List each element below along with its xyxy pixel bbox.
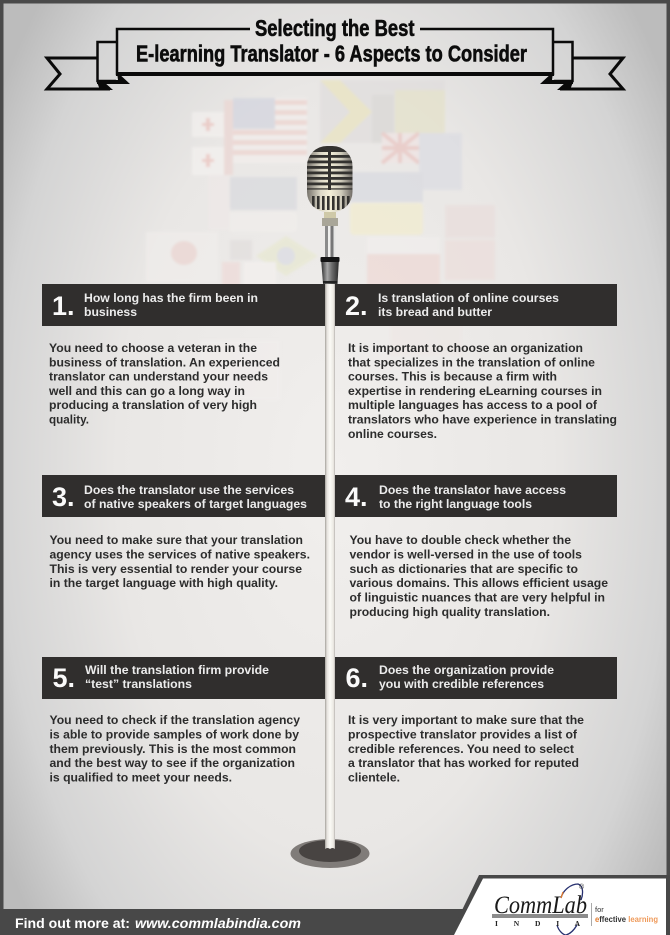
logo panel: [450, 875, 670, 935]
heading bar 6: [335, 657, 617, 699]
body text 3: This is very essential to render your course: [50, 562, 302, 576]
flag: South Africa: [320, 80, 445, 143]
body text 5: [50, 713, 300, 785]
microphone stand pole: [325, 280, 335, 847]
panel 3: [42, 475, 325, 590]
heading bar 4: 4.: [345, 482, 368, 512]
body text 4: [350, 533, 608, 619]
panel 1: [42, 284, 325, 426]
heading bar 5: “test” translations: [85, 677, 192, 691]
logo: CommLab India: I N D I A: [495, 919, 581, 928]
title text: [136, 15, 527, 66]
heading bar 4: [335, 475, 617, 517]
flag: blue and white panel: [229, 177, 297, 232]
body text 1: business of translation. An experienced: [49, 355, 280, 369]
heading bar 4: to the right language tools: [379, 497, 532, 511]
body text 6: prospective translator provides a list of: [348, 727, 578, 741]
panel 2: [335, 284, 617, 441]
heading bar 2: Is translation of online courses: [378, 291, 559, 305]
body text 1: well and this can go a long way in: [48, 384, 245, 398]
body text 2: [348, 341, 617, 441]
heading bar 2: its bread and butter: [378, 305, 492, 319]
heading bar 2: 2.: [345, 291, 368, 321]
flag: red and white stripes: [208, 175, 495, 290]
body text 1: translator can understand your needs: [49, 370, 268, 384]
body text 4: such as dictionaries that are specific to: [350, 562, 578, 576]
body text 2: that specializes in the translation of online: [348, 355, 595, 369]
logo: CommLab India: ®: [579, 883, 585, 891]
body text 5: them previously. This is the most common: [50, 742, 296, 756]
flag: Ukraine: [350, 172, 423, 235]
logo: CommLab India: [492, 883, 658, 935]
body text 4: various domains. This allows efficient usage: [350, 576, 608, 590]
heading bar 3: [42, 475, 325, 517]
title ribbon: [47, 15, 623, 90]
heading bar 3: of native speakers of target languages: [84, 497, 307, 511]
flag: Georgia pair: [192, 100, 233, 175]
microphone: [305, 146, 355, 284]
body text 6: credible references. You need to select: [348, 742, 574, 756]
heading bar 1: 1.: [52, 291, 75, 321]
body text 1: quality.: [49, 412, 89, 426]
body text 2: It is important to choose an organization: [348, 341, 583, 355]
body text 5: is qualified to meet your needs.: [50, 771, 232, 785]
ribbon folds: [97, 42, 573, 84]
body text 4: You have to double check whether the: [350, 533, 571, 547]
flag: Australia: [419, 133, 462, 190]
heading bar 1: How long has the firm been in: [84, 291, 258, 305]
heading bar 6: 6.: [346, 663, 368, 693]
body text 6: clientele.: [348, 771, 400, 785]
body text 3: You need to make sure that your translation: [50, 533, 303, 547]
footer link text: www.commlabindia.com: [135, 915, 301, 931]
body text 1: producing a translation of very high: [49, 398, 257, 412]
heading bar 5: 5.: [52, 663, 75, 693]
body text 4: vendor is well-versed in the use of tools: [350, 547, 582, 561]
body text 6: [348, 713, 584, 785]
body text 5: and the best way to see if the organization: [50, 756, 295, 770]
flag: Brazil: [230, 236, 318, 276]
panel 6: [335, 657, 617, 785]
title text: E-learning Translator - 6 Aspects to Consider: [136, 40, 527, 66]
body text 2: online courses.: [348, 427, 437, 441]
body text 3: agency uses the services of native speakers.: [50, 547, 310, 561]
panel 4: [335, 475, 617, 619]
footer bar: [0, 909, 470, 935]
logo: CommLab India: CommLab: [494, 892, 587, 919]
background: faded world flags: [146, 80, 495, 400]
heading bar 5: [42, 657, 325, 699]
body text 4: producing high quality translation.: [350, 605, 550, 619]
title text: Selecting the Best: [255, 15, 415, 41]
body text 2: courses. This is because a firm with: [348, 370, 557, 384]
heading bar 4: Does the translator have access: [379, 483, 566, 497]
body text 1: You need to choose a veteran in the: [49, 341, 257, 355]
heading bar 2: [335, 284, 617, 326]
ribbon right tail: [557, 58, 623, 90]
heading bar 3: Does the translator use the services: [84, 483, 294, 497]
body text 2: translators who have experience in translating: [348, 412, 617, 426]
body text 3: [50, 533, 310, 590]
body text 6: It is very important to make sure that the: [348, 713, 584, 727]
logo: CommLab India: for: [595, 905, 604, 914]
flag: Japan: [146, 232, 218, 282]
microphone stand base: [290, 838, 370, 868]
heading bar 6: Does the organization provide: [379, 663, 554, 677]
footer link text: [15, 915, 301, 931]
heading bar 5: Will the translation firm provide: [85, 663, 269, 677]
microphone neck: [322, 212, 338, 258]
logo: CommLab India: effective learning: [595, 915, 658, 924]
flag fragments below the headings: [200, 262, 462, 400]
body text 4: of linguistic nuances that are very helpful in: [350, 591, 605, 605]
flag: United Kingdom: [382, 133, 419, 163]
ribbon left tail: [47, 58, 113, 90]
body text 3: in the target language with high quality.: [50, 576, 278, 590]
microphone connector: [320, 257, 340, 284]
body text 6: a translator that has worked for reputed: [348, 756, 579, 770]
ribbon frame: [117, 29, 553, 74]
heading bar 6: you with credible references: [379, 677, 544, 691]
body text 1: [48, 341, 280, 426]
heading bar 1: [42, 284, 325, 326]
heading bar 1: business: [84, 305, 137, 319]
heading bar 3: 3.: [52, 482, 75, 512]
flag: United States: [233, 98, 307, 163]
microphone head: [305, 146, 355, 212]
footer link text: Find out more at:: [15, 915, 130, 931]
panel 5: [42, 657, 325, 785]
body text 5: You need to check if the translation agency: [50, 713, 300, 727]
body text 2: multiple languages has access to a pool of: [348, 398, 598, 412]
body text 2: expertise in rendering eLearning courses in: [348, 384, 602, 398]
body text 5: is able to provide samples of work done by: [50, 727, 299, 741]
